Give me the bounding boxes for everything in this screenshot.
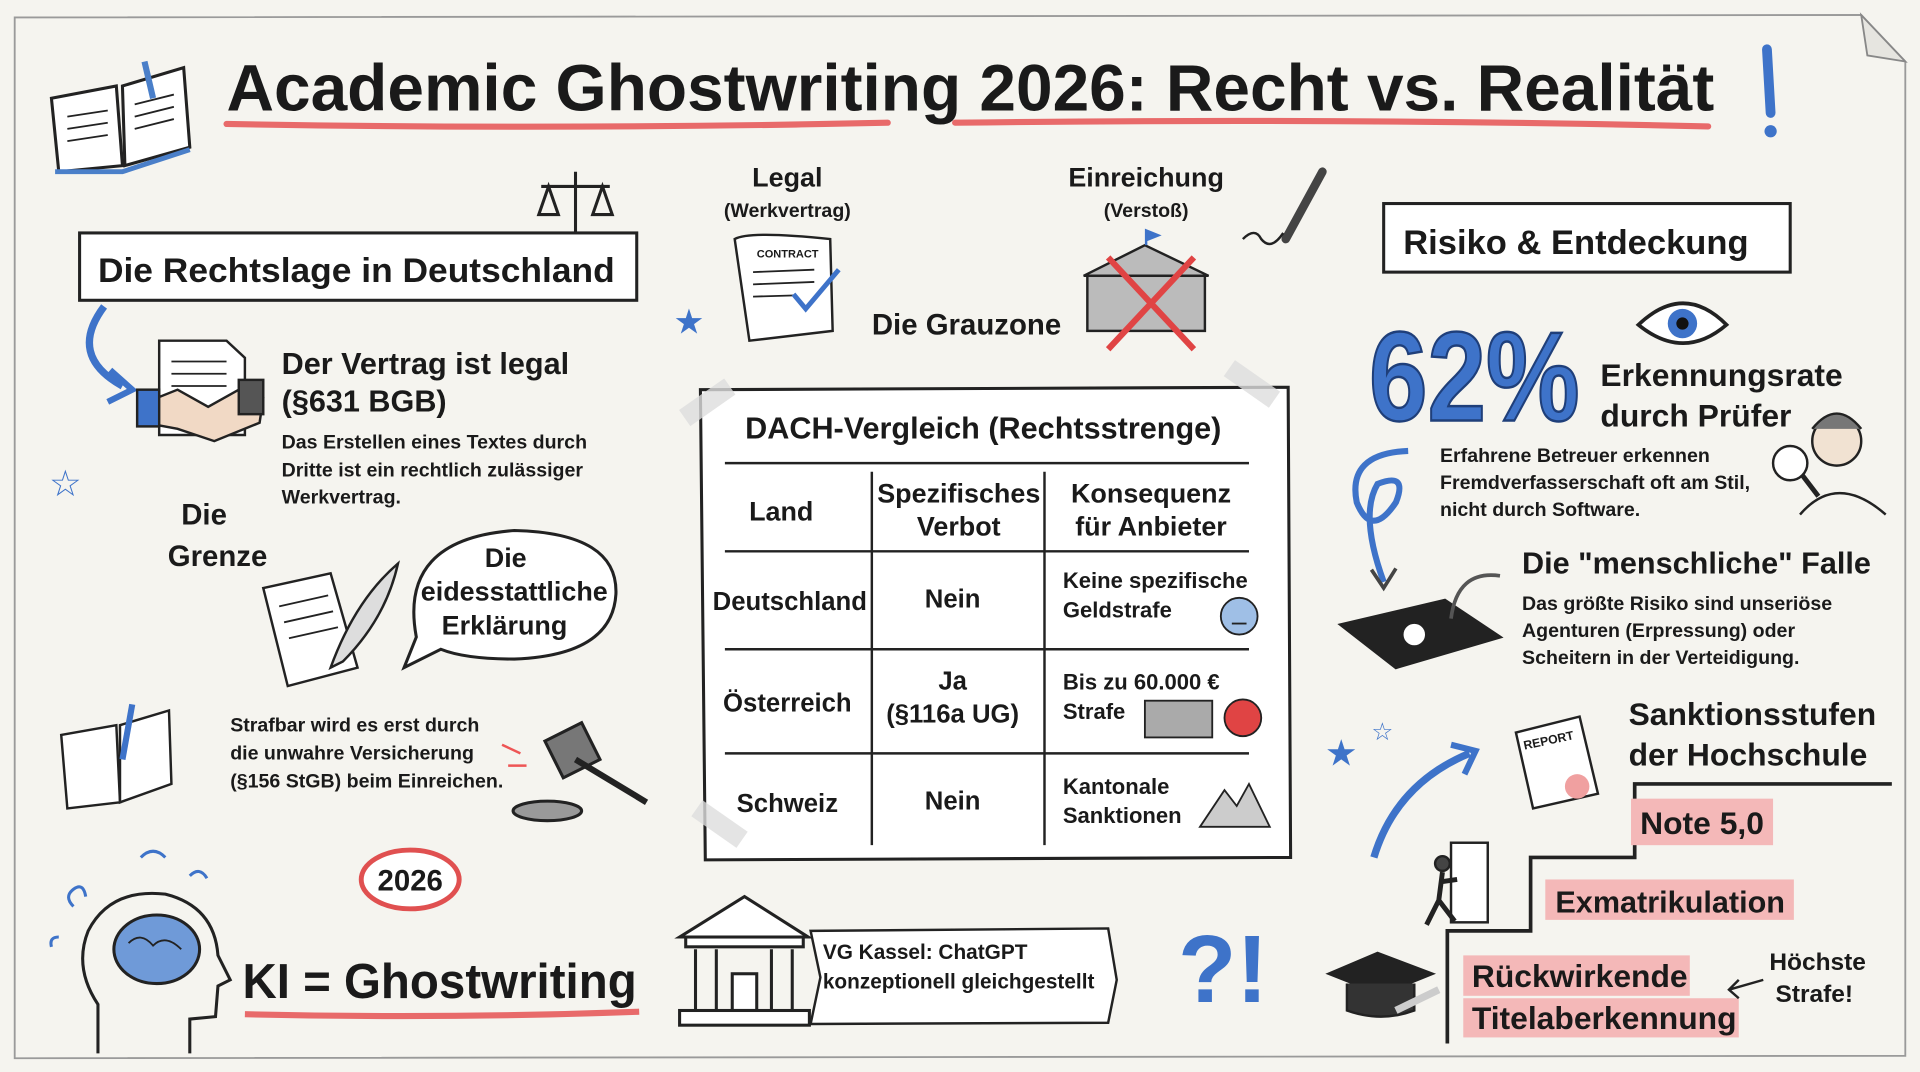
heading: Sanktionsstufen (1629, 696, 1876, 773)
heading: Sanktionsstufen: der Hochschule (1629, 737, 1867, 773)
text: Die menschliche Falle (1522, 546, 1871, 669)
icon: graduation cap (1329, 953, 1439, 1017)
staircase: Exmatrikulation (1555, 886, 1785, 920)
speech bubble: eidesstattliche Erklärung (404, 530, 616, 668)
icon: gavel (502, 723, 647, 821)
table: DACH-Vergleich: Land (749, 497, 813, 527)
text: Erfahrene Betreuer: Erfahrene Betreuer erkennen (1440, 445, 1710, 467)
text: Strafbar: Strafbar wird es erst durch (230, 714, 479, 736)
text: Der Vertrag ist legal: Werkvertrag. (282, 487, 401, 509)
table: DACH-Vergleich: Deutschland (713, 588, 867, 616)
table: DACH-Vergleich: Österreich (723, 689, 852, 718)
icon: stars (1325, 719, 1393, 774)
heading: KI = Ghostwriting: KI = Ghostwriting (242, 955, 637, 1009)
heading: Sanktionsstufen: Sanktionsstufen (1629, 696, 1876, 732)
icon: exclamation (1764, 49, 1777, 137)
staircase (1447, 784, 1892, 1044)
icon: ?!: ?! (1178, 917, 1268, 1023)
icon: report (1516, 717, 1598, 808)
table: DACH-Vergleich: Spezifisches (877, 478, 1040, 508)
text: Erkennungsrate (1600, 357, 1843, 433)
heading box: Rechtslage (80, 233, 637, 300)
text: Erkennungsrate: Erkennungsrate (1600, 357, 1843, 393)
text: Erkennungsrate: durch Prüfer (1600, 397, 1791, 433)
icon: eye (1638, 303, 1727, 343)
text: Einreichung: Einreichung (1068, 162, 1224, 192)
icon: head with brain (51, 851, 230, 1053)
heading: Die Grenze: Grenze (168, 540, 267, 573)
banner: VG Kassel: VG Kassel: ChatGPT (823, 941, 1028, 964)
table: DACH-Vergleich: Sanktionen (1063, 803, 1182, 828)
table: DACH-Vergleich: Geldstrafe (1063, 597, 1172, 622)
icon: scales (539, 172, 612, 243)
speech bubble: eidesstattliche Erklärung: Erklärung (442, 611, 567, 641)
table: DACH-Vergleich: Keine spezifische (1063, 568, 1248, 593)
text: Erfahrene Betreuer (1440, 445, 1750, 521)
table: DACH-Vergleich: Strafe (1063, 699, 1125, 724)
icon: university with red X (1084, 230, 1209, 349)
icon: contract: CONTRACT (757, 248, 819, 260)
callout: Höchste Strafe: Strafe! (1776, 981, 1853, 1008)
text: Einreichung: (Verstoß) (1104, 200, 1189, 222)
speech bubble: eidesstattliche Erklärung: eidesstattliche (421, 576, 608, 606)
arrow: spiral (1355, 451, 1408, 588)
callout: Höchste Strafe (1729, 949, 1866, 1008)
text: Der Vertrag ist legal: Dritte ist ein rechtlich zulässiger (282, 460, 583, 482)
table: DACH-Vergleich: DACH-Vergleich (Rechtsstrenge) (745, 412, 1221, 446)
banner: VG Kassel (811, 928, 1117, 1024)
text: Die menschliche Falle: Agenturen (Erpressung) oder (1522, 620, 1795, 642)
table: DACH-Vergleich: Konsequenz (1071, 478, 1231, 508)
icon: paper and quill (263, 564, 398, 686)
table: DACH-Vergleich: für Anbieter (1075, 511, 1227, 541)
text: Der Vertrag ist legal: (§631 BGB) (282, 385, 447, 419)
title: Academic Ghostwriting 2026: Recht vs. Realität (227, 51, 1714, 125)
speech bubble: eidesstattliche Erklärung: Die (485, 543, 527, 573)
heading: Die Grenze (168, 498, 267, 573)
icon: door with person (1427, 843, 1488, 925)
text: Die menschliche Falle: Scheitern in der Verteidigung. (1522, 647, 1799, 669)
icon: star: ☆ (49, 463, 82, 504)
banner: VG Kassel: konzeptionell gleichgestellt (823, 970, 1094, 993)
text: Einreichung (1068, 162, 1224, 222)
staircase: Titelaberkennung (1472, 1000, 1737, 1036)
staircase: Note 5,0 (1640, 805, 1764, 841)
text: Der Vertrag ist legal: Das Erstellen eines Textes durch (282, 431, 587, 453)
icon: contract (735, 235, 839, 341)
icon: courthouse (680, 897, 809, 1025)
table: DACH-Vergleich: Verbot (917, 511, 1001, 541)
arrow: blue curve (89, 306, 132, 402)
table: DACH-Vergleich: Ja (938, 668, 968, 696)
staircase: Rückwirkende (1472, 958, 1688, 994)
text: Strafbar: die unwahre Versicherung (230, 742, 474, 764)
icon: report: REPORT (1522, 728, 1575, 753)
text: Legal Werkvertrag: Legal (752, 162, 823, 192)
icon: book with pen (61, 704, 171, 808)
text: Erfahrene Betreuer: Fremdverfasserschaft oft am Stil, (1440, 472, 1750, 494)
icon: trap hole (1341, 575, 1500, 668)
table: DACH-Vergleich: Kantonale (1063, 774, 1169, 799)
text: Die Grauzone: Die Grauzone (872, 309, 1061, 342)
heading box: Rechtslage: Die Rechtslage in Deutschland (98, 252, 615, 290)
heading box: Risiko: Risiko & Entdeckung (1403, 224, 1749, 262)
text: Die menschliche Falle: Die "menschliche" Falle (1522, 546, 1871, 580)
icon: stars: ☆ (1371, 719, 1393, 746)
text: Erfahrene Betreuer: nicht durch Software. (1440, 499, 1640, 521)
heading: Die Grenze: Die (181, 498, 227, 531)
icon: document with handshake (137, 341, 263, 441)
stat: 62%: 62% (1369, 305, 1580, 447)
text: Der Vertrag ist legal: Der Vertrag ist legal (282, 347, 569, 381)
table: DACH-Vergleich: Schweiz (737, 790, 838, 818)
badge: 2026 (361, 850, 459, 909)
callout: Höchste Strafe: Höchste (1769, 949, 1866, 976)
text: Die menschliche Falle: Das größte Risiko sind unseriöse (1522, 593, 1832, 615)
arrow: up (1374, 745, 1476, 857)
badge: 2026: 2026 (378, 864, 443, 897)
icon: star: ★ (673, 303, 704, 341)
table: DACH-Vergleich: (§116a UG) (886, 701, 1019, 729)
text: Strafbar (230, 714, 503, 793)
icon: pen (1243, 172, 1322, 244)
text: Legal Werkvertrag: (Werkvertrag) (724, 200, 851, 222)
heading box: Risiko (1384, 204, 1790, 272)
text: Der Vertrag ist legal (282, 347, 587, 509)
icon: person with magnifier (1773, 414, 1886, 515)
text: Legal Werkvertrag (724, 162, 851, 222)
icon: stars: ★ (1325, 733, 1358, 774)
icon: open book (51, 62, 190, 172)
table: DACH-Vergleich: Nein (925, 586, 981, 614)
table: DACH-Vergleich: Bis zu 60.000 € (1063, 670, 1220, 695)
table: DACH-Vergleich (679, 360, 1291, 860)
table: DACH-Vergleich: Nein (925, 788, 981, 816)
text: Strafbar: (§156 StGB) beim Einreichen. (230, 771, 503, 793)
